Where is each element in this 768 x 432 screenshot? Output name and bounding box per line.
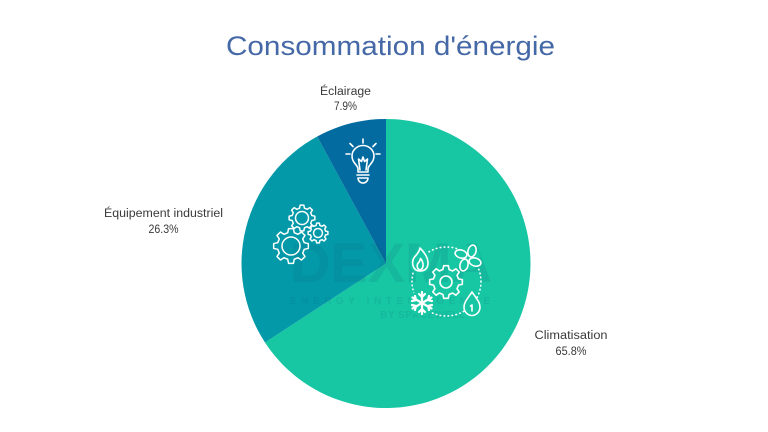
watermark: ENERGY INTELLIGENCE [290,296,490,307]
label: Équipement industriel: 26.3% [148,224,178,236]
label: Climatisation: Climatisation [534,330,608,342]
water drop [464,292,480,316]
title: Consommation d'énergie [226,31,555,61]
label: Climatisation [534,330,608,358]
icon: climate control [409,244,482,316]
snowflake [409,290,435,316]
central gear [430,266,462,298]
watermark: BY SPACEWELL [380,310,465,321]
icon: light bulb [346,139,380,183]
label: Éclairage [320,85,371,113]
fan [454,244,482,272]
label: Équipement industriel [104,207,223,236]
label: Climatisation: 65.8% [556,346,586,358]
label: Équipement industriel: Équipement industriel [104,207,223,220]
watermark: DEXMA [290,231,492,294]
dotted ring [412,247,481,316]
watermark [290,231,492,321]
slice: Équipement industriel 26.3% [242,136,386,342]
label: Éclairage: Éclairage [320,85,371,98]
pie chart [242,119,530,408]
icon: industrial gears [274,205,328,263]
slice: Climatisation 65.8% [265,119,530,408]
slice: Éclairage 7.9% [317,119,386,264]
flame [413,248,428,271]
label: Éclairage: 7.9% [334,101,357,113]
